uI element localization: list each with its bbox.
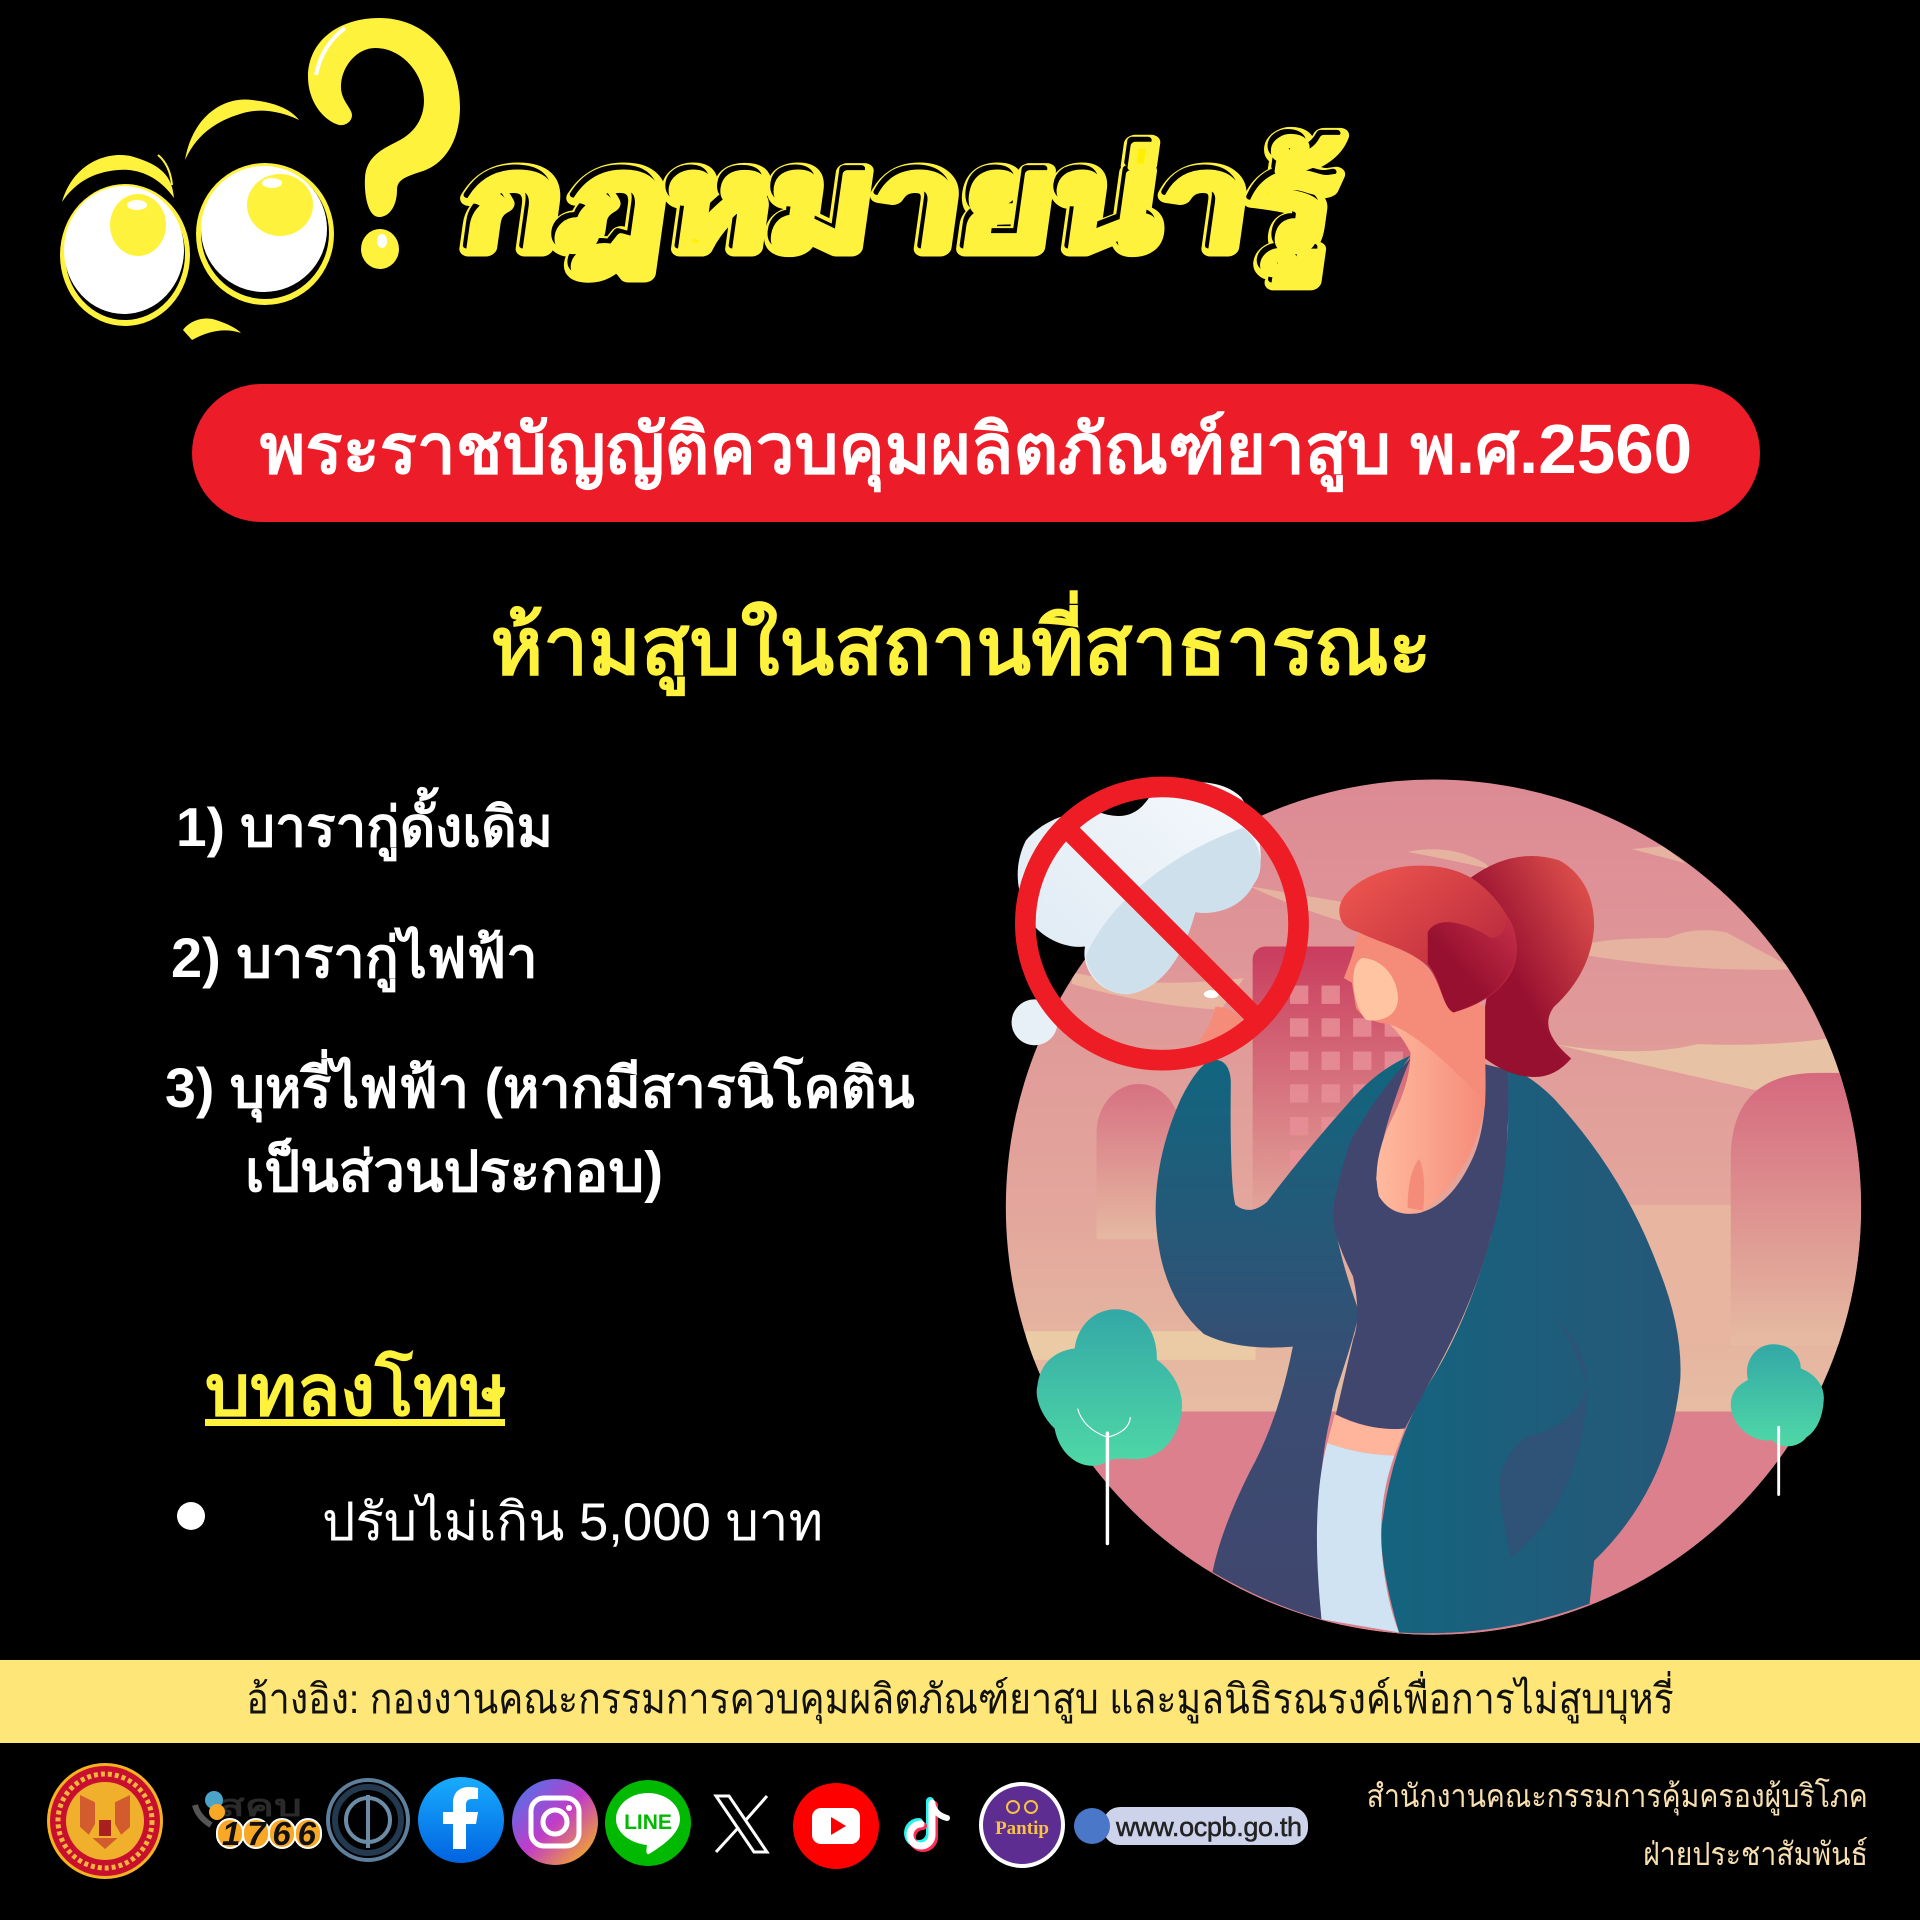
icon: hotline 1766: สคบ	[218, 1790, 302, 1823]
list item 1: 1) บารากู่ดั้งเดิม	[176, 796, 553, 858]
icon: website pill	[1074, 1807, 1308, 1845]
icon: YouTube	[793, 1783, 879, 1869]
icon: TikTok	[908, 1801, 947, 1848]
bullet	[177, 1502, 205, 1530]
trousers	[1317, 1443, 1399, 1632]
icon: upper brow	[185, 100, 299, 160]
list item 3: เป็นส่วนประกอบ)	[245, 1140, 663, 1203]
icon: X	[716, 1796, 767, 1852]
list item 3	[165, 1049, 915, 1203]
list item 2: 2) บารากู่ไฟฟ้า	[171, 926, 538, 989]
hand and cigarette	[1198, 1007, 1244, 1050]
icon: right eye	[196, 163, 334, 305]
icon: Pantip: Pantip	[995, 1818, 1049, 1839]
department name: ฝ่ายประชาสัมพันธ์	[1643, 1836, 1868, 1872]
reference text: อ้างอิง: กองงานคณะกรรมการควบคุมผลิตภัณฑ์ยาสูบ และมูลนิธิรณรงค์เพื่อการไม่สูบบุหรี่	[246, 1676, 1674, 1722]
woman figure	[1156, 856, 1681, 1633]
title text: กฎหมายน่ารู้	[453, 129, 1343, 283]
illustration: woman smoking with prohibition sign	[1006, 776, 1862, 1635]
icon: instagram	[512, 1779, 598, 1865]
face	[1344, 932, 1485, 1102]
icon: facebook	[418, 1777, 504, 1863]
icon: LINE	[605, 1780, 691, 1866]
title text: กฎหมายน่ารู้	[450, 126, 1340, 280]
icon: OCPB seal	[47, 1763, 163, 1879]
icon: lower brow	[183, 318, 241, 340]
icon: website pill: www.ocpb.go.th	[1115, 1812, 1302, 1842]
heading: no smoking in public places: ห้ามสูบในสถานที่สาธารณะ	[490, 602, 1432, 691]
penalty heading: บทลงโทษ	[205, 1352, 507, 1431]
neck and chest	[1377, 990, 1485, 1214]
jacket right side	[1381, 1067, 1681, 1633]
reference strip	[0, 1660, 1920, 1743]
smoke cloud	[1012, 782, 1261, 1045]
icon: question mark	[308, 18, 460, 269]
icon: hotline 1766	[195, 1790, 321, 1852]
footer logos	[47, 1763, 1308, 1879]
title text: กฎหมายน่ารู้	[454, 131, 1343, 285]
list item 3: 3) บุหรี่ไฟฟ้า (หากมีสารนิโคติน	[165, 1057, 915, 1119]
penalty text: ปรับไม่เกิน 5,000 บาท	[322, 1493, 823, 1552]
left tree	[1037, 1309, 1182, 1545]
scene background	[980, 760, 1880, 1664]
jacket inner shadow	[1499, 1317, 1587, 1558]
icon: left eye	[60, 184, 190, 326]
top	[1333, 1058, 1508, 1429]
prohibition sign	[1025, 787, 1299, 1060]
hair top	[1339, 866, 1517, 1013]
title logo: eyes and question mark	[60, 18, 460, 340]
cigarette	[1204, 990, 1219, 998]
midriff	[1327, 1414, 1405, 1456]
icon: LINE: LINE	[624, 1811, 672, 1834]
icon: circular logo	[328, 1780, 408, 1860]
icon: hotline 1766: 1766	[222, 1815, 317, 1852]
right tree	[1731, 1344, 1824, 1496]
agency name: สำนักงานคณะกรรมการคุ้มครองผู้บริโภค	[1367, 1778, 1868, 1814]
banner: law name	[192, 384, 1760, 522]
hair ponytail	[1471, 856, 1594, 1077]
banner text: พระราชบัญญัติควบคุมผลิตภัณฑ์ยาสูบ พ.ศ.2560	[260, 410, 1692, 488]
icon: left brow	[62, 155, 174, 202]
icon: Pantip	[981, 1784, 1063, 1866]
jacket left side and raised sleeve	[1156, 1056, 1410, 1619]
